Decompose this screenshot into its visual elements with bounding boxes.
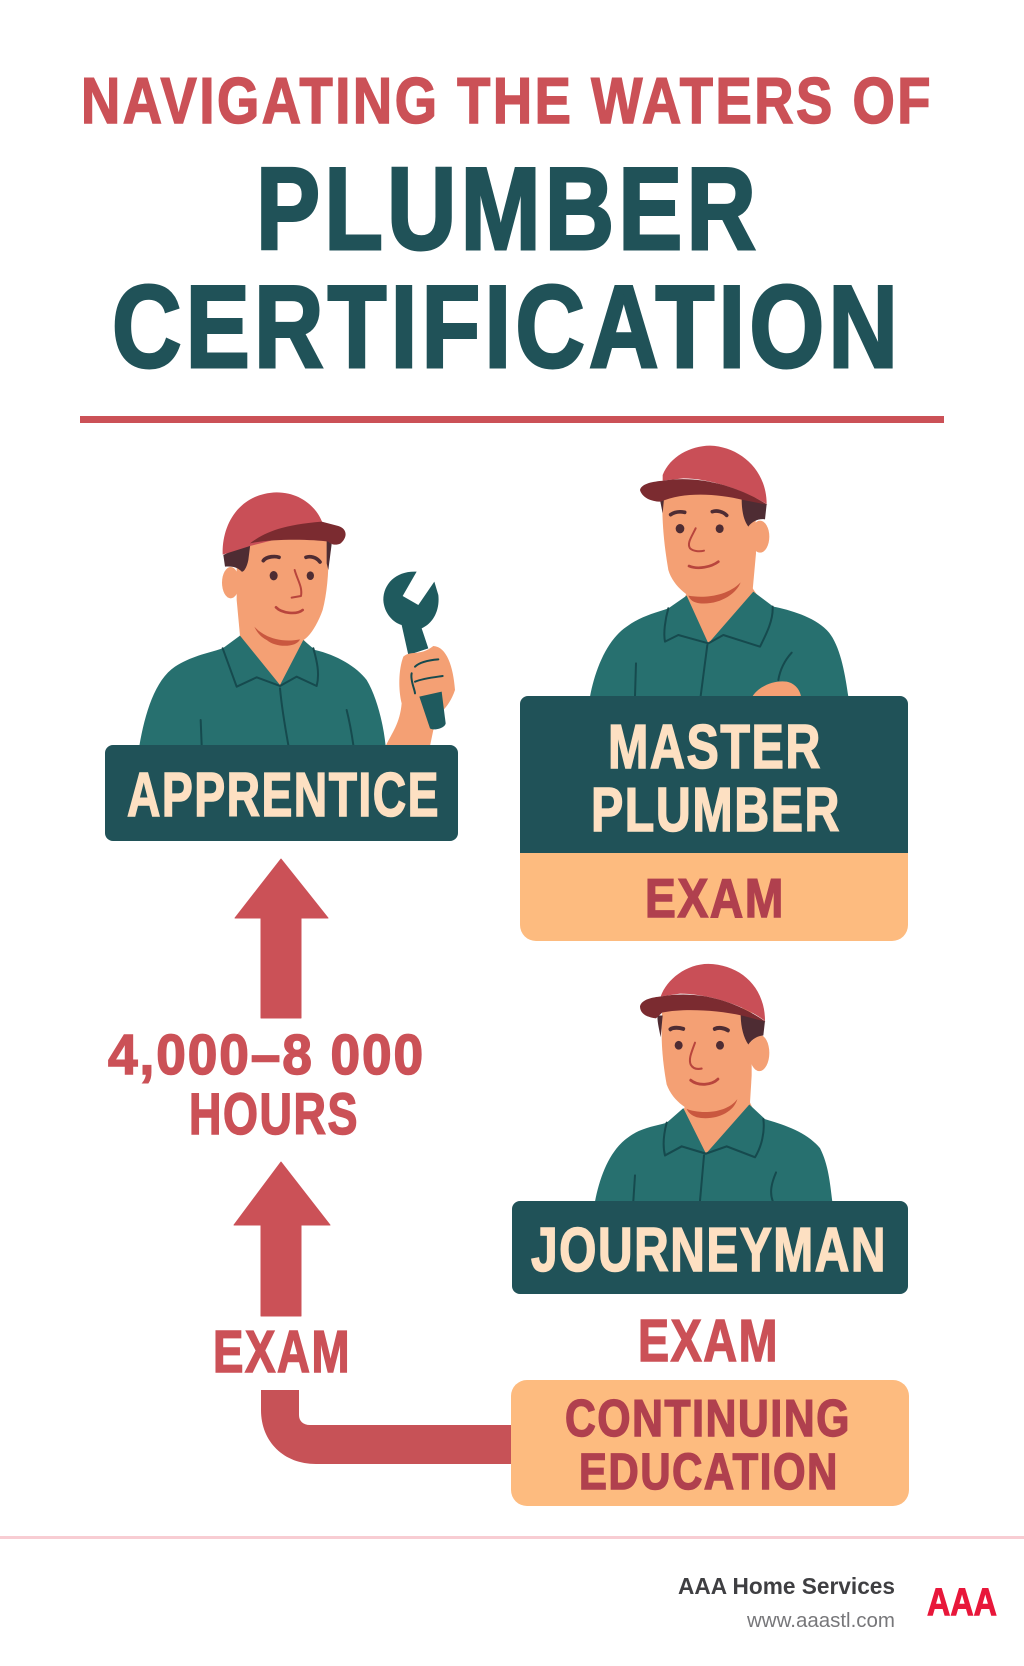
title: [81, 65, 933, 392]
exam label: journeyman: EXAM: [638, 1308, 779, 1374]
arrow: hours up to apprentice: [235, 859, 328, 1018]
arrow: exam up to hours: [234, 1162, 330, 1316]
label box: master plumber: MASTER: [608, 713, 822, 782]
website: www.aaastl.com: [746, 1610, 895, 1632]
character: master plumber: [590, 446, 848, 697]
continuing education box: EDUCATION: [579, 1443, 839, 1500]
hours label: [108, 1023, 425, 1147]
hours label: HOURS: [189, 1082, 359, 1147]
label box: master plumber: PLUMBER: [591, 776, 841, 845]
logo: AAA: AAA: [927, 1582, 997, 1624]
panel: master plumber: [520, 446, 908, 941]
continuing education box: [511, 1380, 909, 1506]
label box: master plumber: [520, 696, 908, 853]
panel: journeyman: [511, 964, 909, 1506]
title line: plumber: PLUMBER: [256, 144, 760, 274]
continuing education box: CONTINUING: [565, 1390, 851, 1448]
footer: company credit: [678, 1573, 997, 1632]
label box: apprentice: [105, 745, 458, 841]
label box: journeyman: [512, 1201, 908, 1294]
label box: journeyman: JOURNEYMAN: [531, 1216, 887, 1285]
exam strip: master plumber: EXAM: [645, 867, 785, 929]
hours label: 4,000–8 000: [108, 1023, 425, 1087]
panel: apprentice: [105, 492, 458, 841]
exam strip: master plumber: [520, 853, 908, 941]
character: apprentice with wrench: [139, 492, 455, 746]
company name: AAA Home Services: [678, 1573, 895, 1599]
label box: apprentice: APPRENTICE: [127, 761, 440, 830]
exam label: left column: EXAM: [213, 1319, 351, 1385]
elbow connector from continuing education: [261, 1390, 511, 1464]
character: journeyman: [595, 964, 832, 1202]
